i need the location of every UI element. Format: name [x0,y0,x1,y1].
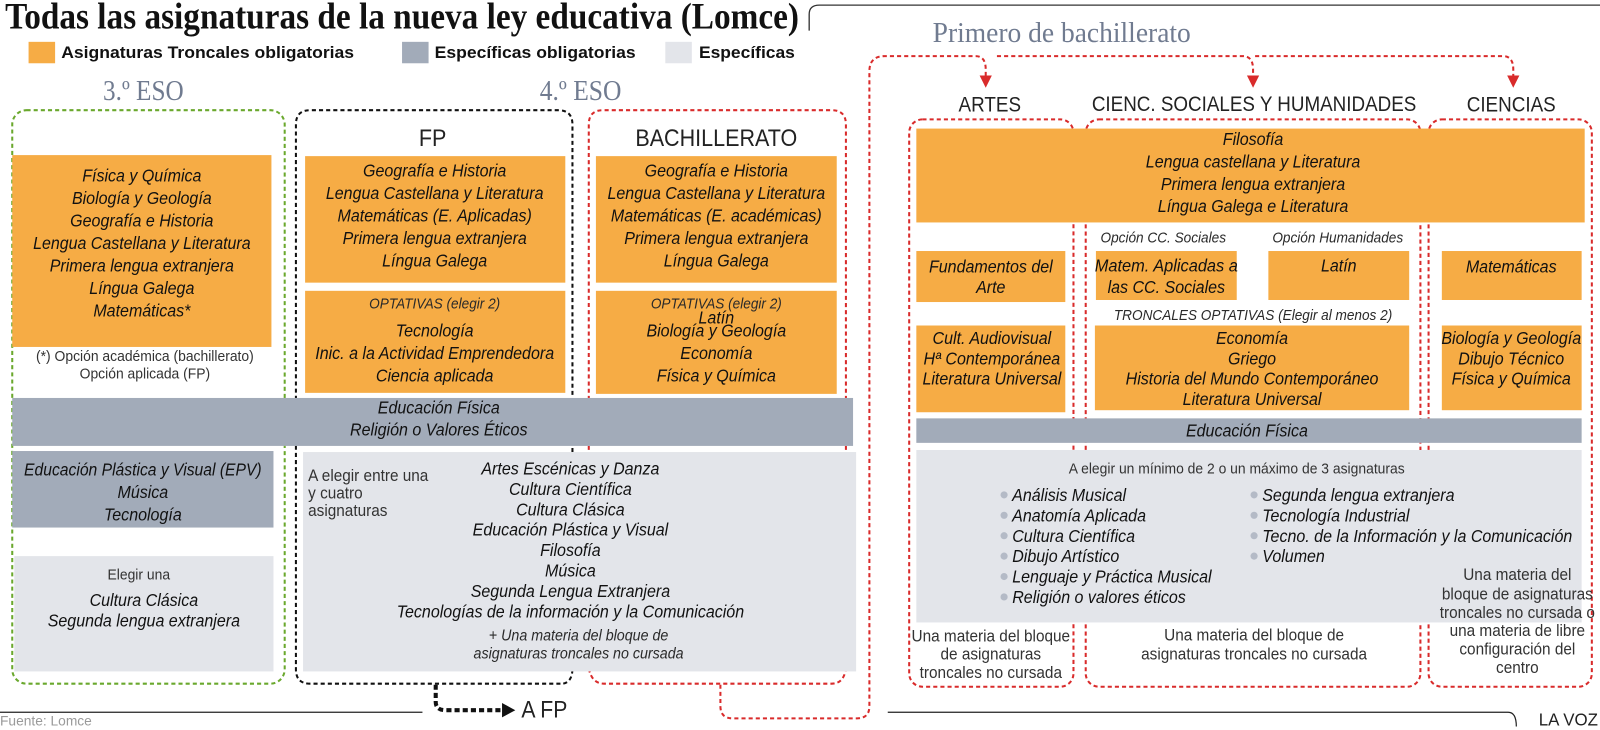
source: Fuente: Lomce [0,714,92,729]
panel: Fundamentos del Arte: Fundamentos del [929,257,1054,277]
panel: 3.º ESO específicas: Segunda lengua extranjera [48,611,240,631]
label: troncales optativas: TRONCALES OPTATIVAS (Elegir al menos 2) [1114,307,1392,324]
panel: 3.º ESO específicas [14,556,273,671]
arrow: a FP: A FP [521,696,567,723]
bullet list right [1251,486,1572,566]
panel: Matemáticas aplicadas [1095,251,1238,300]
panel: 4.º ESO específicas: Artes Escénicas y Danza [480,459,659,479]
panel: troncales comunes: Filosofía [1223,129,1283,149]
panel: Artes optativas: Literatura Universal [922,369,1063,389]
heading: 3.º ESO: 3.º ESO [103,76,184,107]
panel: FP troncales: Geografía e Historia [363,161,506,181]
panel: 3.º ESO troncales: Física y Química [82,166,201,186]
panel: FP troncales: Língua Galega [382,251,487,270]
bullet list right: Tecnología Industrial [1262,506,1411,526]
panel: Sociales optativas: Economía [1216,328,1288,348]
panel: 3.º ESO troncales: Geografía e Historia [70,211,213,231]
bullet list left: Anatomía Aplicada [1011,506,1146,526]
dashed frame: Ciencias sociales y humanidades [1086,119,1420,687]
note: Ciencias: configuración del [1459,641,1575,659]
panel: troncales comunes: Língua Galega e Literatura [1158,197,1348,216]
panel: Bachillerato troncales: Lengua Castellana y Literatura [608,183,825,203]
bullet list right: Tecno. de la Información y la Comunicación [1262,526,1572,546]
panel: 3.º ESO específicas obligatorias: Música [117,482,168,502]
panel: Bachillerato optativas: Biología y Geología [646,321,786,341]
top rule [809,5,1600,31]
panel: FP optativas [305,291,565,393]
panel: 4.º ESO específicas: Música [545,561,596,581]
panel: Bachillerato optativas: Economía [680,344,752,363]
band: específicas obligatorias: Religión o Valores Éticos [350,420,527,440]
panel: 4.º ESO específicas: Cultura Científica [509,479,632,499]
panel: específicas bachillerato [916,450,1582,622]
note: Ciencias: troncales no cursada o [1440,604,1595,622]
panel: Sociales optativas [1095,326,1409,410]
panel: 4.º ESO específicas: + Una materia del bloque de [489,628,668,644]
panel: Bachillerato optativas: Física y Química [657,366,776,386]
panel: FP troncales [305,124,565,283]
note: opción académica: (*) Opción académica (bachillerato) [36,349,254,365]
panel: FP optativas: OPTATIVAS (elegir 2) [369,296,500,313]
panel: 3.º ESO específicas: Elegir una [107,567,170,584]
panel: FP troncales: Matemáticas (E. Aplicadas) [338,206,532,226]
panel: Sociales optativas: Literatura Universal [1183,390,1323,409]
panel: Ciencias optativas: Dibujo Técnico [1458,349,1564,368]
panel: Bachillerato troncales: Geografía e Historia [645,161,788,181]
panel: Latín: Latín [1321,256,1357,276]
panel: 4.º ESO específicas: y cuatro [308,485,363,503]
note: Ciencias: Una materia del [1463,567,1571,584]
note: Artes: Una materia del bloque [912,628,1070,645]
panel: 4.º ESO específicas: Tecnologías de la información y la Comunicación [397,602,744,621]
dashed frame: FP [296,110,572,684]
bullet list left: Dibujo Artístico [1012,547,1119,566]
bullet list right: Volumen [1262,547,1325,566]
panel: 3.º ESO troncales: Lengua Castellana y Literatura [33,233,251,253]
note: Artes [912,628,1070,682]
panel: Matemáticas: Matemáticas [1466,257,1557,277]
brand: La Voz: LA VOZ [1539,710,1598,730]
panel: Bachillerato troncales: BACHILLERATO [635,124,797,151]
panel: FP optativas: Ciencia aplicada [376,366,493,386]
bullet list left: Religión o valores éticos [1012,588,1186,607]
panel: Artes optativas: Cult. Audiovisual [933,328,1052,348]
panel: Latín [1268,251,1409,300]
bullet list left [1001,486,1213,607]
panel: Bachillerato troncales: Língua Galega [664,251,769,270]
label: Opción CC. Sociales: Opción CC. Sociales [1101,230,1226,247]
panel: 3.º ESO troncales: Língua Galega [89,278,194,298]
footer rule right [888,712,1516,727]
panel: 3.º ESO troncales: Matemáticas* [93,301,191,320]
panel: Bachillerato optativas: OPTATIVAS (elegir 2) [651,296,782,313]
legend: Asignaturas Troncales obligatorias [61,44,354,62]
dashed frame: Ciencias [1429,119,1592,687]
note: Artes: troncales no cursada [920,665,1062,682]
panel: 3.º ESO troncales [12,155,271,347]
note: Sociales: asignaturas troncales no cursada [1141,646,1367,664]
arrow: a FP [436,685,567,723]
bullet list left: Cultura Científica [1012,526,1135,546]
panel: FP optativas: Inic. a la Actividad Emprendedora [315,344,554,363]
panel: 3.º ESO específicas: Cultura Clásica [90,591,198,610]
panel: 3.º ESO troncales: Biología y Geología [72,189,212,208]
bullet list right: Segunda lengua extranjera [1262,486,1455,505]
legend: Específicas [699,44,795,62]
panel: 4.º ESO específicas: Filosofía [540,541,601,560]
panel: Fundamentos del Arte: Arte [975,277,1005,297]
arrow: Bachillerato to Primero de bachillerato [720,56,1519,718]
panel: Bachillerato troncales: Matemáticas (E. académicas) [611,206,822,226]
panel: 3.º ESO específicas obligatorias: Educación Plástica y Visual (EPV) [24,460,262,480]
band: específicas obligatorias: Educación Física [378,398,500,417]
band: específicas obligatorias [12,398,853,446]
label: Opción Humanidades: Opción Humanidades [1272,230,1403,247]
panel: 4.º ESO específicas: A elegir entre una [308,468,429,485]
dashed frame: 3.º ESO [12,110,285,684]
note: Ciencias [1440,567,1595,677]
panel: Bachillerato optativas [596,291,837,394]
bullet list left: Análisis Musical [1011,486,1127,505]
panel: troncales comunes [916,129,1585,222]
panel: 3.º ESO específicas obligatorias [12,451,273,528]
panel: Artes optativas: Hª Contemporánea [923,349,1060,368]
dashed frame: Artes [909,119,1073,687]
heading: Artes: ARTES [959,94,1021,117]
panel: 4.º ESO específicas: asignaturas [308,502,388,520]
panel: 4.º ESO específicas: Educación Plástica y Visual [473,520,669,540]
panel: 4.º ESO específicas: asignaturas troncales no cursada [474,646,684,663]
bullet list left: Lenguaje y Práctica Musical [1012,567,1213,587]
panel: troncales comunes: Lengua castellana y Literatura [1146,152,1360,171]
note: Sociales: Una materia del bloque de [1164,627,1344,644]
heading: Primero de bachillerato: Primero de bachillerato [933,18,1191,49]
note: Ciencias: una materia de libre [1450,623,1585,640]
panel: FP troncales: FP [419,124,446,151]
panel: Bachillerato optativas: Latín [699,308,734,328]
panel: 3.º ESO troncales: Primera lengua extranjera [50,256,234,276]
panel: Matemáticas aplicadas: las CC. Sociales [1108,277,1225,297]
heading: Ciencias: CIENCIAS [1467,94,1556,117]
panel: FP troncales: Lengua Castellana y Literatura [326,183,543,203]
panel: 3.º ESO específicas obligatorias: Tecnología [104,505,182,525]
note: Ciencias: centro [1496,660,1539,677]
legend [29,42,795,63]
note: Artes: de asignaturas [941,646,1041,664]
band: Educación Física [916,418,1582,443]
note: Sociales [1141,627,1367,664]
footer rule left [0,711,422,713]
note: opción académica: Opción aplicada (FP) [80,366,210,383]
dashed frame: Bachillerato [589,110,846,684]
panel: Sociales optativas: Historia del Mundo Contemporáneo [1126,369,1378,389]
panel: Sociales optativas: Griego [1228,349,1276,368]
band: Educación Física: Educación Física [1186,421,1308,441]
panel: Fundamentos del Arte [916,251,1065,302]
panel: Ciencias optativas: Biología y Geología [1441,328,1581,348]
heading: 4.º ESO: 4.º ESO [540,76,621,107]
panel: 4.º ESO específicas: Cultura Clásica [516,500,625,519]
panel: Artes optativas [916,326,1065,412]
note: opción académica [36,349,254,383]
panel: FP optativas: Tecnología [396,321,474,341]
panel: Ciencias optativas: Física y Química [1452,369,1571,389]
panel: específicas bachillerato: A elegir un mínimo de 2 o un máximo de 3 asignaturas [1069,461,1405,478]
heading: Cienc. sociales y humanidades: CIENC. SOCIALES Y HUMANIDADES [1092,92,1416,116]
panel: Bachillerato troncales: Primera lengua extranjera [624,228,808,248]
note: Ciencias: bloque de asignaturas [1442,586,1593,604]
panel: Matemáticas aplicadas: Matem. Aplicadas a [1095,256,1238,276]
panel: Bachillerato troncales [596,124,837,283]
panel: Ciencias optativas [1441,326,1582,410]
panel: 4.º ESO específicas [303,452,856,671]
panel: 4.º ESO específicas: Segunda Lengua Extranjera [471,581,670,601]
panel: FP troncales: Primera lengua extranjera [343,228,527,248]
panel: Matemáticas [1442,251,1582,300]
legend: Específicas obligatorias [435,44,636,62]
panel: troncales comunes: Primera lengua extranjera [1161,174,1345,194]
